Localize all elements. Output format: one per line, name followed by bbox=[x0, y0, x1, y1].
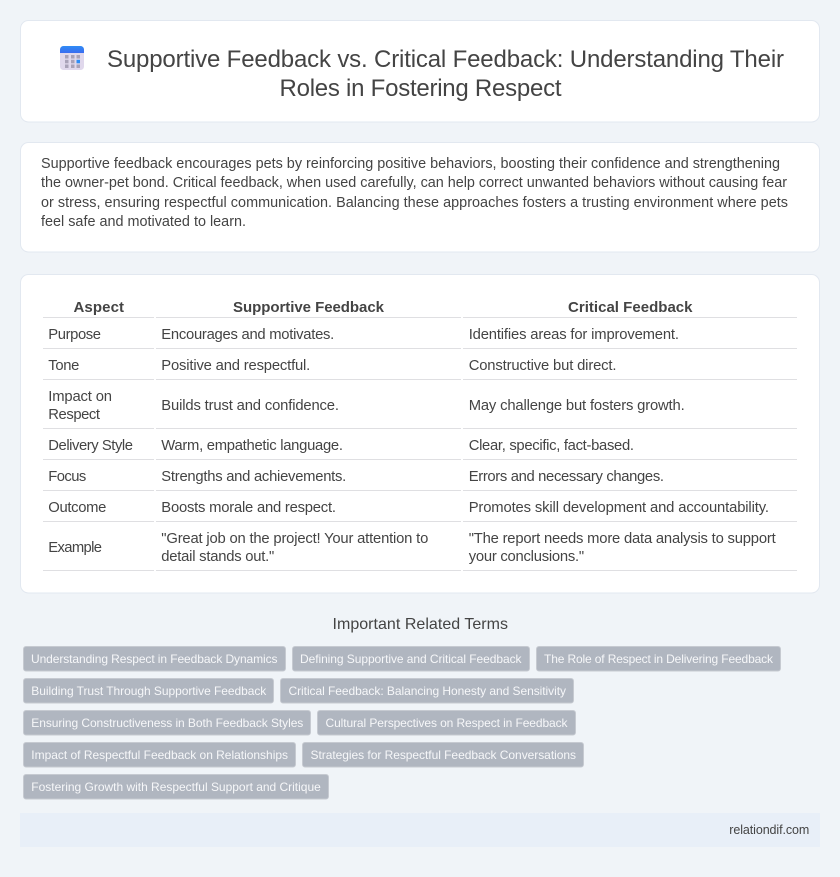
table row: purpose: Encourages and motivates. bbox=[161, 327, 334, 343]
table row: tone: Constructive but direct. bbox=[469, 358, 616, 374]
table row: outcome bbox=[43, 500, 797, 522]
table row: example: detail stands out." bbox=[161, 549, 274, 565]
table header row: Supportive Feedback bbox=[233, 299, 385, 316]
table row: tone bbox=[43, 358, 797, 380]
tag bbox=[24, 678, 274, 703]
table row: outcome: Boosts morale and respect. bbox=[161, 500, 336, 516]
tag bbox=[24, 646, 286, 671]
footer: relationdif.com bbox=[729, 823, 809, 837]
text block: introduction paragraph: the owner-pet bond. Critical feedback, when used carefully, can help correct unwanted behaviors without causing fear bbox=[41, 175, 787, 191]
table row: impact on respect: May challenge but fosters growth. bbox=[469, 398, 685, 414]
footer bbox=[20, 813, 820, 847]
table row: purpose: Purpose bbox=[48, 327, 101, 343]
tag bbox=[24, 774, 328, 799]
tag: Defining Supportive and Critical Feedback bbox=[300, 652, 522, 666]
tag bbox=[318, 710, 576, 735]
title bbox=[107, 46, 784, 102]
table header row: Aspect bbox=[74, 299, 124, 316]
panel: introduction bbox=[20, 142, 820, 252]
table row: tone: Positive and respectful. bbox=[161, 358, 310, 374]
table row: example bbox=[43, 531, 797, 571]
table row: impact on respect: Respect bbox=[48, 407, 100, 423]
table row: impact on respect: Impact on bbox=[48, 389, 112, 405]
tag: Ensuring Constructiveness in Both Feedback Styles bbox=[31, 716, 303, 730]
tag: The Role of Respect in Delivering Feedback bbox=[544, 652, 774, 666]
table row: delivery style: Warm, empathetic language. bbox=[161, 438, 343, 454]
table row: purpose bbox=[43, 327, 797, 349]
table row: example: "The report needs more data analysis to support bbox=[469, 531, 776, 547]
tag: Fostering Growth with Respectful Support and Critique bbox=[31, 780, 321, 794]
table row: focus: Strengths and achievements. bbox=[161, 469, 346, 485]
table row: outcome: Outcome bbox=[48, 500, 106, 516]
table row: example: Example bbox=[48, 540, 102, 556]
tag: Strategies for Respectful Feedback Conversations bbox=[310, 748, 576, 762]
text block: introduction paragraph: feel safe and motivated to learn. bbox=[41, 214, 246, 230]
table row: delivery style: Delivery Style bbox=[48, 438, 133, 454]
text block: introduction paragraph: or stress, ensuring respectful communication. Balancing these approaches fosters a trusting environment where pets bbox=[41, 195, 788, 211]
title: Roles in Fostering Respect bbox=[280, 75, 562, 102]
tag: Building Trust Through Supportive Feedback bbox=[31, 684, 267, 698]
tag: Understanding Respect in Feedback Dynamics bbox=[31, 652, 278, 666]
table row: delivery style bbox=[43, 438, 797, 460]
text block: introduction paragraph: Supportive feedback encourages pets by reinforcing positive behaviors, boosting their confidence and strengthening bbox=[41, 156, 780, 172]
panel: header bbox=[20, 20, 820, 122]
text block: introduction paragraph bbox=[41, 156, 788, 230]
table row: purpose: Identifies areas for improvement. bbox=[469, 327, 679, 343]
table header row bbox=[43, 299, 797, 318]
heading: important related terms: Important Related Terms bbox=[332, 616, 508, 633]
tag bbox=[302, 742, 584, 767]
table row: example: "Great job on the project! Your attention to bbox=[161, 531, 428, 547]
table row: impact on respect: Builds trust and confidence. bbox=[161, 398, 339, 414]
tag: Impact of Respectful Feedback on Relationships bbox=[31, 748, 288, 762]
tag bbox=[292, 646, 530, 671]
panel: related term tags bbox=[24, 646, 780, 799]
title: Supportive Feedback vs. Critical Feedback: Understanding Their bbox=[107, 46, 784, 73]
tag bbox=[24, 742, 296, 767]
icon: calendar bbox=[60, 46, 84, 70]
table row: focus bbox=[43, 469, 797, 491]
table row: example: your conclusions." bbox=[469, 549, 584, 565]
tag bbox=[536, 646, 780, 671]
table row: tone: Tone bbox=[48, 358, 79, 374]
table row: focus: Errors and necessary changes. bbox=[469, 469, 664, 485]
table row: focus: Focus bbox=[48, 469, 86, 485]
panel: comparison table bbox=[20, 274, 820, 593]
tag: Critical Feedback: Balancing Honesty and Sensitivity bbox=[288, 684, 566, 698]
tag bbox=[280, 678, 574, 703]
table row: impact on respect bbox=[43, 389, 797, 429]
tag: Cultural Perspectives on Respect in Feedback bbox=[326, 716, 568, 730]
table row: delivery style: Clear, specific, fact-based. bbox=[469, 438, 634, 454]
table row: outcome: Promotes skill development and accountability. bbox=[469, 500, 769, 516]
tag bbox=[24, 710, 310, 735]
table header row: Critical Feedback bbox=[568, 299, 693, 316]
